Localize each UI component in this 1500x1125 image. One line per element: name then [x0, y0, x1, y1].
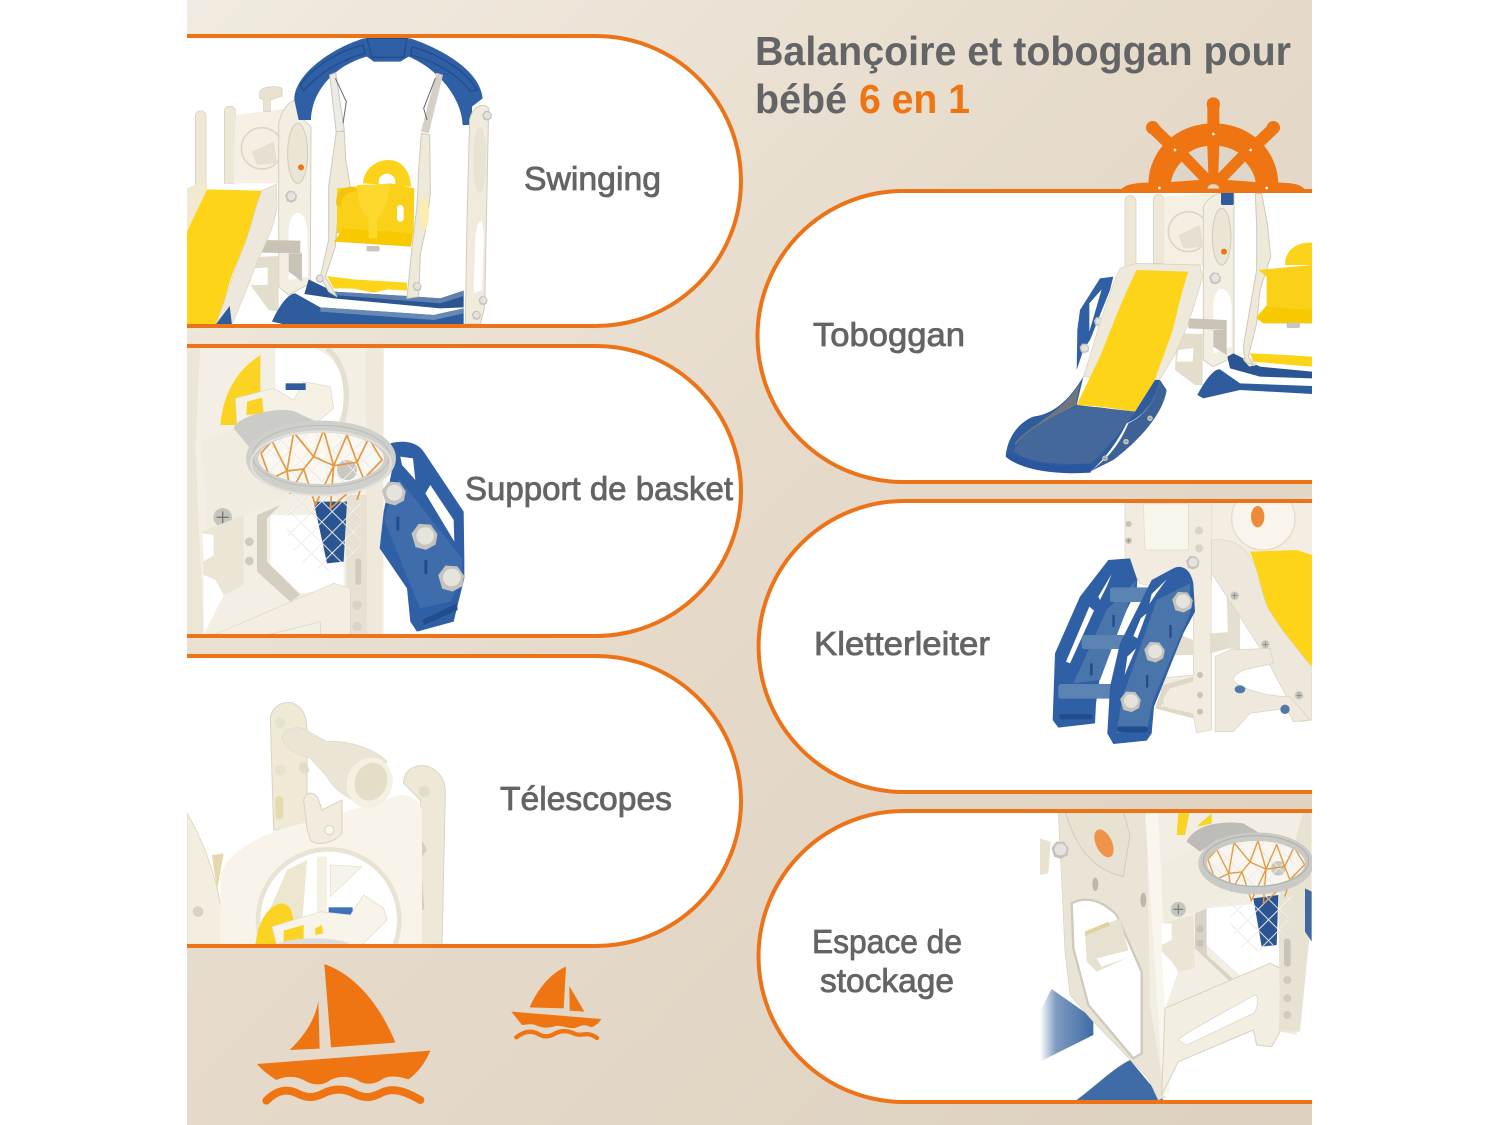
panel outline — [187, 656, 741, 946]
panel: espace de stockage — [758, 811, 1312, 1102]
icon: large sailboat — [257, 964, 430, 1101]
illustration: basketball hoop — [187, 345, 464, 635]
panel: toboggan — [758, 191, 1312, 482]
illustration: swing set — [187, 38, 492, 325]
panel outline — [758, 191, 1312, 482]
illustration: storage space — [1040, 812, 1312, 1100]
panel: swinging — [187, 36, 741, 326]
label: Support de basket: Support de basket — [465, 470, 733, 507]
title: 6 en 1 — [859, 76, 970, 122]
panel outline — [758, 811, 1312, 1102]
background — [187, 0, 1312, 1125]
label: Kletterleiter: Kletterleiter — [814, 625, 990, 662]
panel outline — [187, 346, 741, 636]
label: Espace de stockage: Espace de — [812, 923, 962, 960]
label: Swinging: Swinging — [524, 160, 661, 197]
panel outline — [187, 36, 741, 326]
panel: kletterleiter — [759, 487, 1312, 792]
label: Espace de stockage — [812, 923, 962, 999]
illustration: telescope — [187, 702, 446, 944]
icon: small sailboat — [511, 967, 601, 1038]
panel: telescopes — [187, 654, 743, 948]
panel: basket — [187, 345, 741, 636]
title: bébé — [755, 76, 847, 122]
panel outline — [759, 501, 1312, 792]
label: Télescopes: Télescopes — [500, 780, 672, 817]
illustration: ladder — [1053, 487, 1312, 744]
icon: ship wheel — [1122, 97, 1304, 191]
title — [755, 28, 1291, 122]
illustration: slide — [1006, 192, 1312, 473]
label: Espace de stockage: stockage — [820, 962, 954, 999]
title: Balançoire et toboggan pour — [755, 28, 1291, 74]
label: Toboggan: Toboggan — [813, 316, 965, 353]
